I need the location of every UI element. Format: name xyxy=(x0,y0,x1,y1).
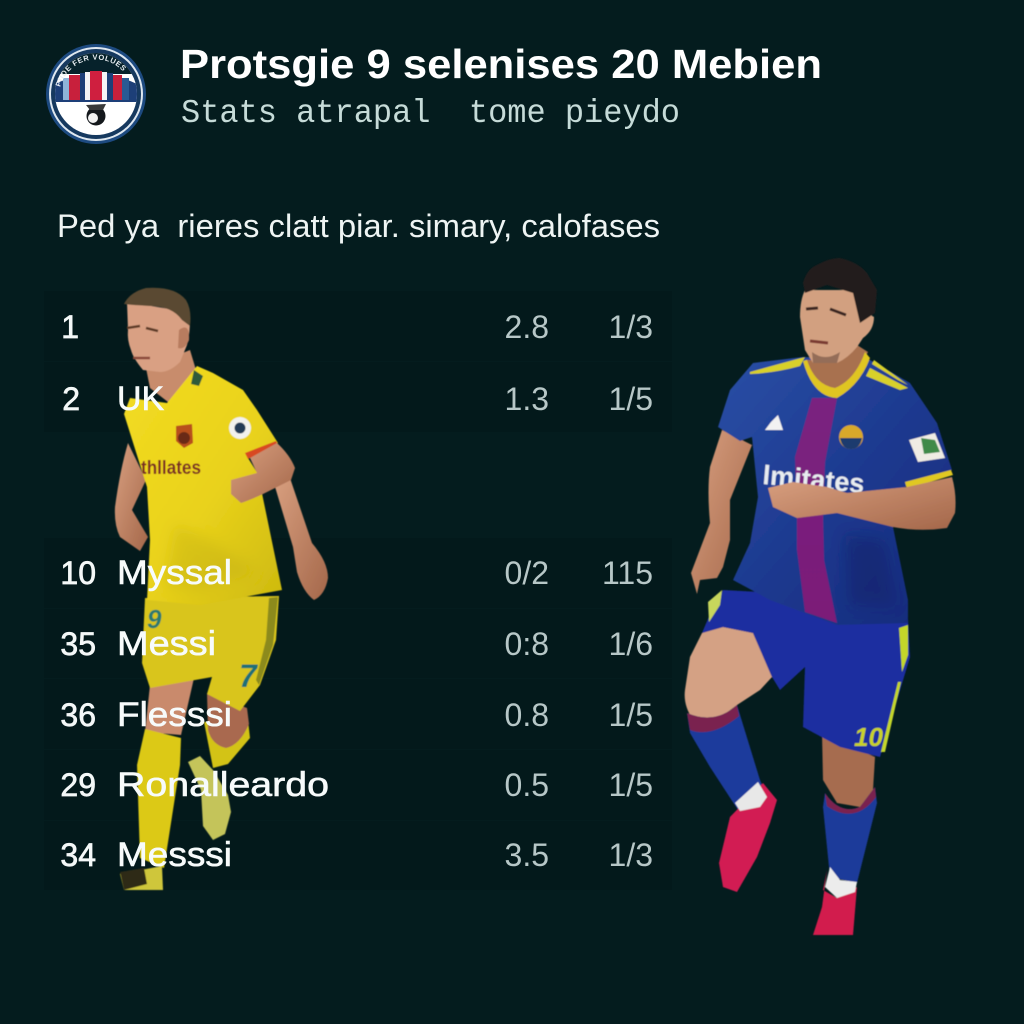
left arm xyxy=(115,443,148,551)
left thigh xyxy=(685,627,772,723)
panel: stats table background xyxy=(44,291,672,890)
face details xyxy=(127,326,158,331)
table row 29: 29 xyxy=(60,767,96,803)
title: Protsgie 9 selenises 20 Mebien xyxy=(180,41,822,87)
table row 10: 0/2 xyxy=(505,555,549,591)
table row 1: 1/3 xyxy=(609,309,653,345)
neck xyxy=(805,345,868,392)
table row 36: Flesssi xyxy=(117,696,232,734)
table row 2: 1.3 xyxy=(505,381,549,417)
table row 35: 0:8 xyxy=(505,626,549,662)
left boot xyxy=(719,783,777,892)
table row 29 xyxy=(60,766,653,804)
player: yellow kit: 7 xyxy=(239,658,259,694)
sock raised xyxy=(204,720,250,768)
sock near xyxy=(137,729,181,868)
adidas logo xyxy=(765,415,783,430)
shirt shading xyxy=(845,535,895,605)
raised thigh xyxy=(207,693,249,748)
table row 1: 1 xyxy=(61,309,79,345)
player: yellow kit xyxy=(115,288,328,890)
hair xyxy=(124,288,190,326)
table row 29: 1/5 xyxy=(609,767,653,803)
table row 2: UK xyxy=(117,380,165,418)
player: yellow kit: thllates xyxy=(141,458,201,479)
table row 36 xyxy=(60,696,653,734)
table row 35: Messi xyxy=(117,625,216,663)
right white sock xyxy=(825,867,857,898)
player: blue kit xyxy=(685,258,956,935)
shorts xyxy=(142,596,279,711)
table row 36: 0.8 xyxy=(505,697,549,733)
hair xyxy=(803,258,877,323)
purple stripe xyxy=(795,398,837,623)
subtitle: Stats atrapal tome pieydo xyxy=(181,95,680,132)
shorts xyxy=(702,590,910,757)
table row 35 xyxy=(60,625,653,663)
neck xyxy=(146,350,196,402)
table row 2: 1/5 xyxy=(609,381,653,417)
left sock xyxy=(687,705,767,810)
table row 1: 2.8 xyxy=(505,309,549,345)
table row 10: 115 xyxy=(602,555,653,591)
left white sock xyxy=(735,782,767,811)
sleeve trim xyxy=(905,470,953,489)
table row 34 xyxy=(60,836,653,874)
table row 29: Ronalleardo xyxy=(117,766,329,804)
sponsor: lmitates xyxy=(761,460,866,499)
table row 35: 35 xyxy=(60,626,96,662)
head xyxy=(127,302,190,372)
table row 10 xyxy=(60,554,653,592)
table row 36: 1/5 xyxy=(609,697,653,733)
shoulder stripes xyxy=(750,357,908,390)
forearm xyxy=(768,477,956,530)
table row 2: 2 xyxy=(62,381,80,417)
player: blue kit: 10 xyxy=(854,722,883,752)
table row 36: 36 xyxy=(60,697,96,733)
face details xyxy=(806,308,846,315)
sleeve patch xyxy=(909,433,945,462)
intro text: Ped ya rieres clatt piar. simary, calofases xyxy=(57,208,660,244)
icon: club badge: PIIDE FER VOLUES xyxy=(55,54,126,87)
icon: club badge xyxy=(46,44,146,144)
table row 29: 0.5 xyxy=(505,767,549,803)
right sock xyxy=(823,787,877,883)
table row 34: Messsi xyxy=(117,836,232,874)
table row 1 xyxy=(61,309,653,345)
table row 34: 34 xyxy=(60,837,96,873)
left arm xyxy=(691,430,752,594)
crest xyxy=(839,425,863,449)
boot raised xyxy=(188,756,231,840)
head xyxy=(800,290,874,363)
back arm xyxy=(273,478,328,600)
shirt xyxy=(124,366,282,605)
boot near xyxy=(120,866,163,890)
table row 10: Myssal xyxy=(117,554,232,592)
front arm xyxy=(231,443,295,503)
table row 34: 3.5 xyxy=(505,837,549,873)
right thigh xyxy=(822,733,875,807)
collar xyxy=(803,352,870,398)
right boot xyxy=(813,870,857,935)
shirt xyxy=(718,357,952,625)
table row 10: 10 xyxy=(60,555,96,591)
table row 34: 1/3 xyxy=(609,837,653,873)
near thigh xyxy=(145,678,194,735)
player: yellow kit: 9 xyxy=(147,604,162,634)
table row 2 xyxy=(62,380,653,418)
table row 35: 1/6 xyxy=(609,626,653,662)
